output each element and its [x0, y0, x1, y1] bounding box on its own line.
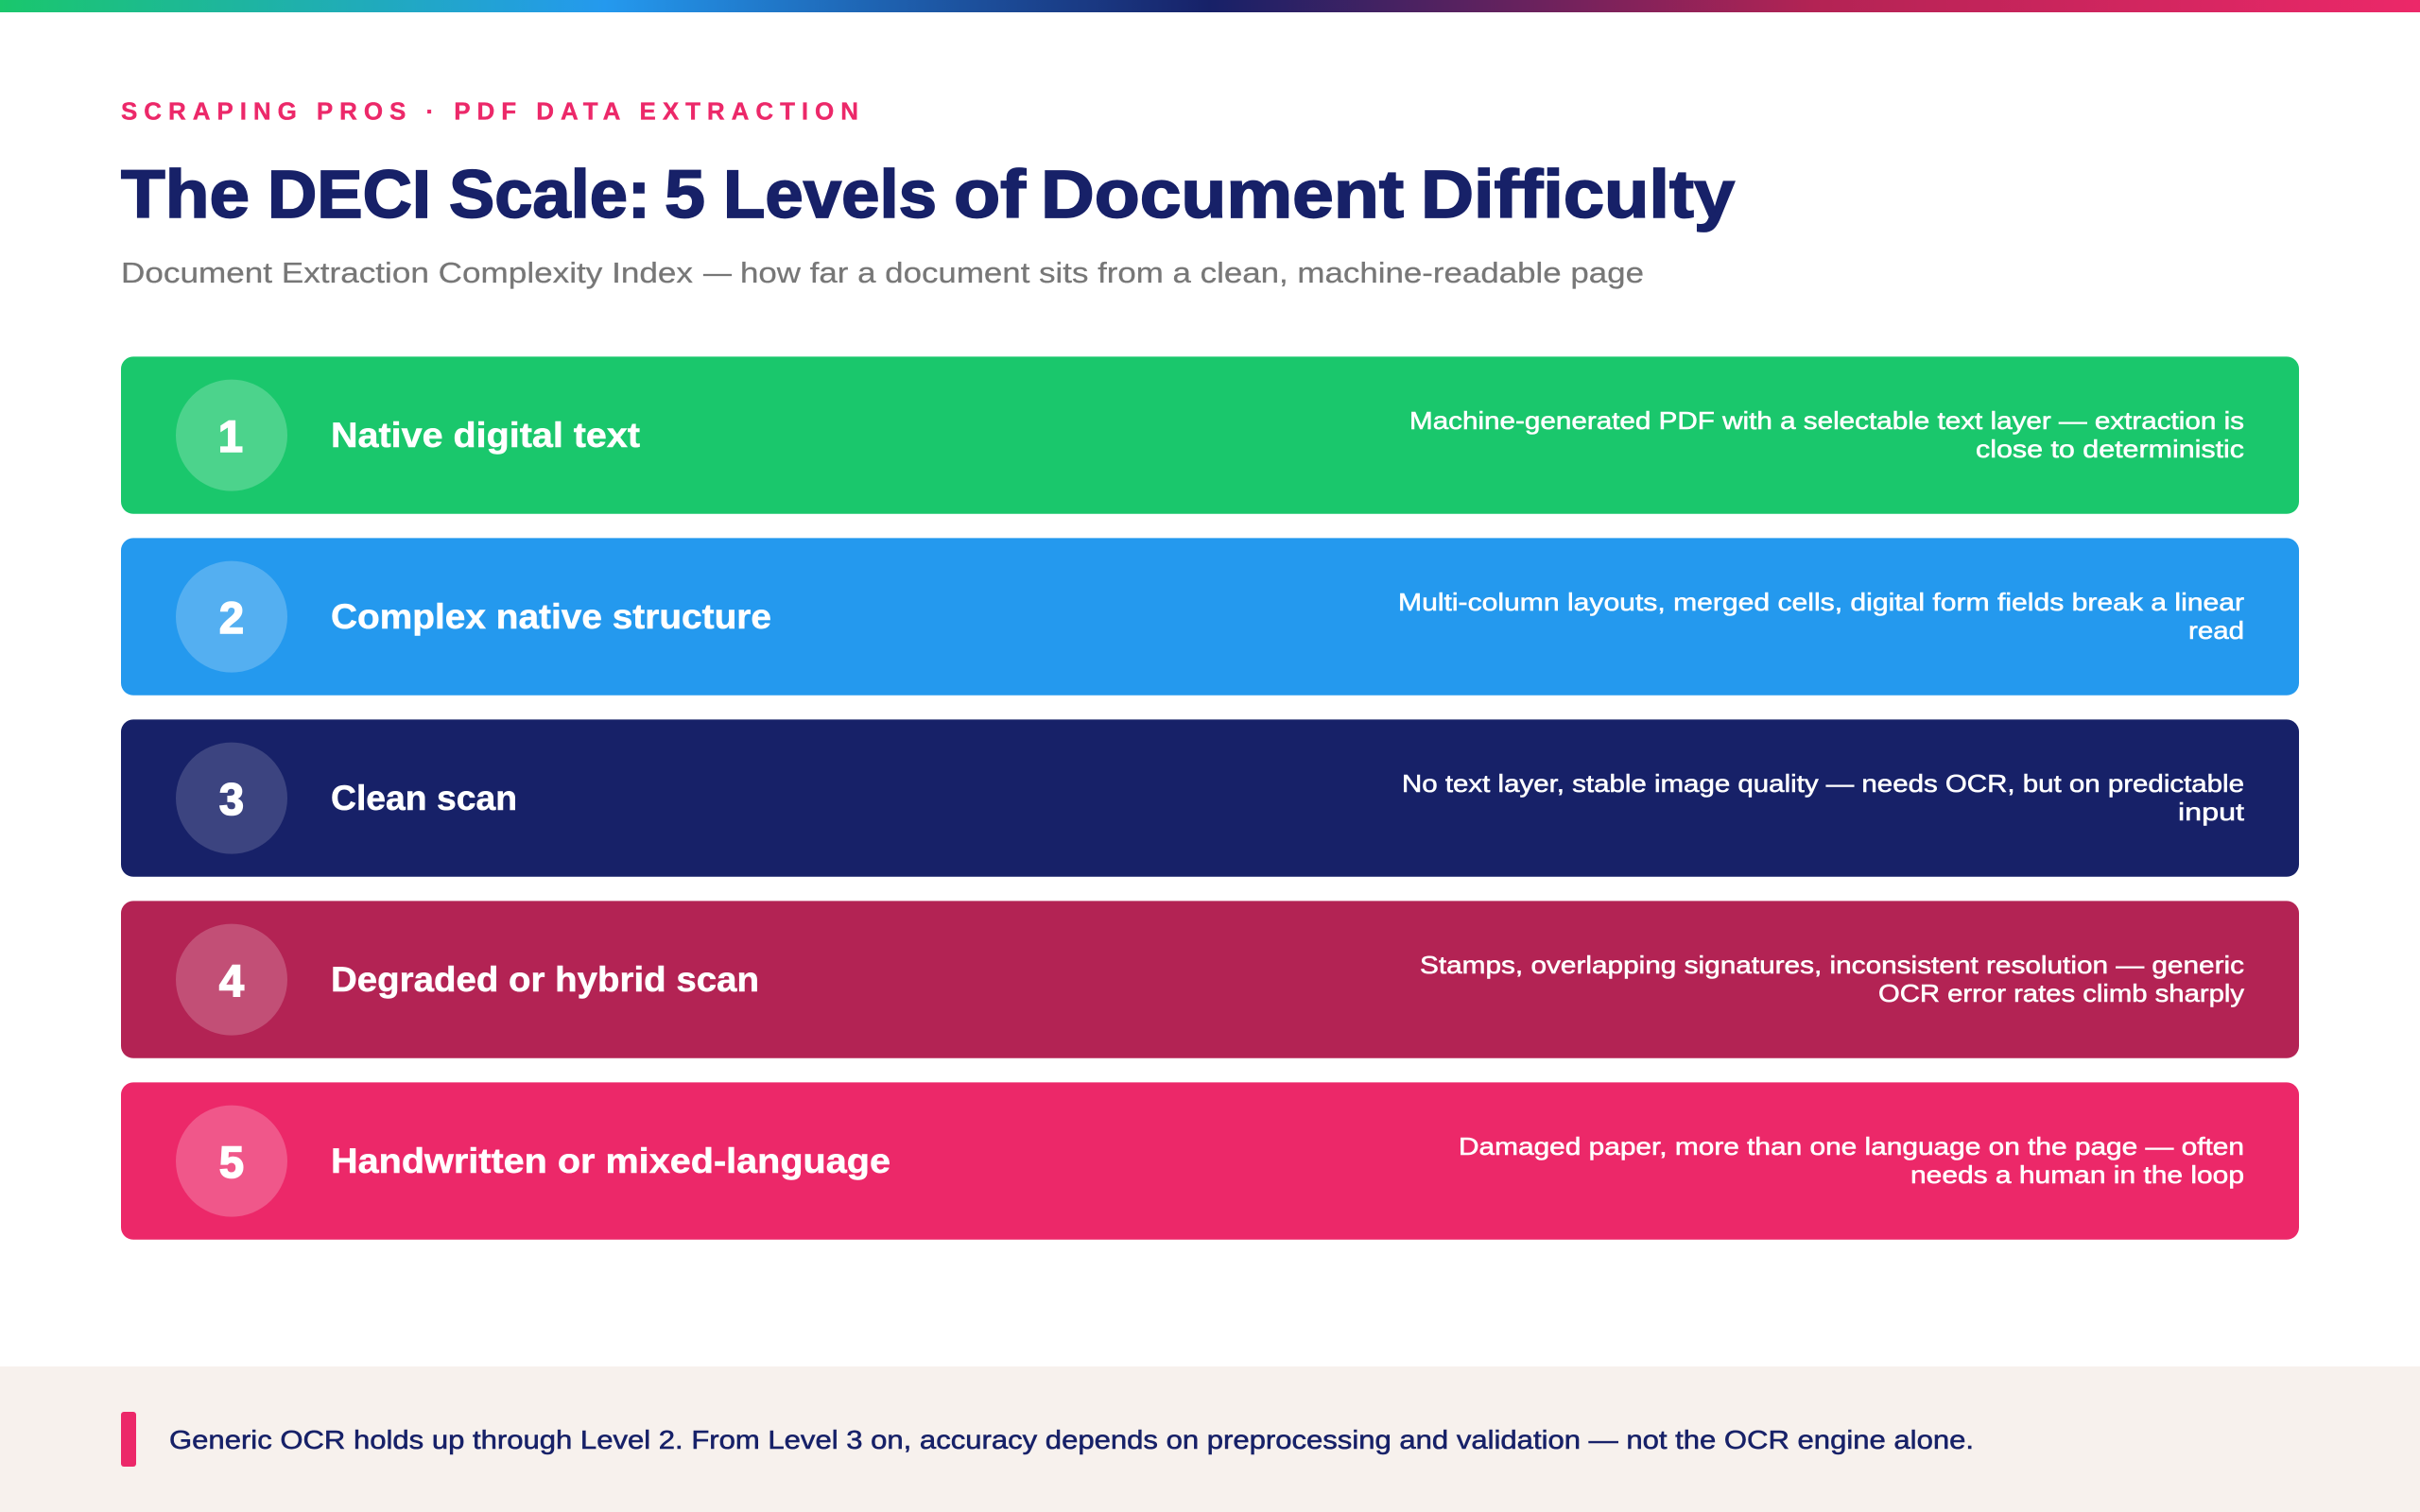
description: level 4	[1420, 951, 2244, 1007]
description: level 1: close to deterministic	[1976, 435, 2244, 463]
description: level 5: needs a human in the loop	[1910, 1160, 2244, 1189]
badge: 4: 4	[219, 955, 244, 1005]
title: of	[954, 158, 1026, 232]
level name: complex native structure: Complex native structure	[331, 597, 771, 636]
description: level 3: input	[2178, 798, 2245, 826]
title: Document	[1041, 158, 1404, 232]
title: Difficulty	[1421, 158, 1736, 232]
level name: degraded or hybrid scan: Degraded or hybrid scan	[331, 960, 759, 999]
subtitle: how far a document sits from a clean, machine-readable page	[740, 256, 1644, 289]
description: level 3: No text layer, stable image quality — needs OCR, but on predictable	[1402, 769, 2244, 798]
title: 5	[665, 158, 705, 232]
subtitle	[121, 256, 1644, 289]
description: level 4: Stamps, overlapping signatures, inconsistent resolution — generic	[1420, 951, 2244, 979]
badge: 1: 1	[218, 411, 243, 461]
panel: level 4	[121, 901, 2299, 1058]
panel: level 5	[121, 1082, 2299, 1240]
description: level 1: Machine-generated PDF with a selectable text layer — extraction is	[1409, 406, 2244, 435]
badge: 2	[176, 561, 287, 673]
badge: 3: 3	[219, 774, 244, 824]
level name: native digital text: Native digital text	[331, 416, 640, 455]
description: level 4: OCR error rates climb sharply	[1878, 979, 2244, 1007]
description: level 1	[1409, 406, 2244, 463]
description: level 5	[1459, 1132, 2244, 1189]
badge: 3	[176, 743, 287, 854]
title: Scale:	[449, 158, 650, 232]
panel: level 2	[121, 538, 2299, 696]
description: level 5: Damaged paper, more than one language on the page — often	[1459, 1132, 2244, 1160]
description: level 2: Multi-column layouts, merged cells, digital form fields break a linear	[1398, 588, 2244, 616]
title: DECI	[268, 158, 431, 232]
badge: 2: 2	[219, 593, 244, 643]
eyebrow: SCRAPING PROS · PDF DATA EXTRACTION	[121, 96, 858, 125]
footer accent bar	[121, 1412, 136, 1467]
panel: level 3	[121, 719, 2299, 877]
description: level 3	[1402, 769, 2245, 826]
badge: 5: 5	[219, 1137, 244, 1187]
top gradient bar	[0, 0, 2420, 12]
panel: level 1	[121, 356, 2299, 514]
description: level 2	[1398, 588, 2244, 644]
badge: 1	[176, 380, 287, 491]
title	[121, 158, 1736, 232]
footer band	[0, 1366, 2420, 1512]
subtitle: —	[703, 256, 732, 289]
badge: 5	[176, 1106, 287, 1217]
header	[121, 96, 1736, 289]
description: level 2: read	[2188, 616, 2244, 644]
footer takeaway: Generic OCR holds up through Level 2. From Level 3 on, accuracy depends on preprocessing and validation — not the OCR engine alone.	[169, 1425, 1974, 1454]
title: Levels	[723, 158, 937, 232]
level name: clean scan: Clean scan	[331, 779, 517, 817]
subtitle: Document Extraction Complexity Index	[121, 256, 694, 289]
level name: handwritten or mixed-language: Handwritten or mixed-language	[331, 1142, 890, 1180]
title: The	[121, 158, 250, 232]
badge: 4	[176, 924, 287, 1036]
